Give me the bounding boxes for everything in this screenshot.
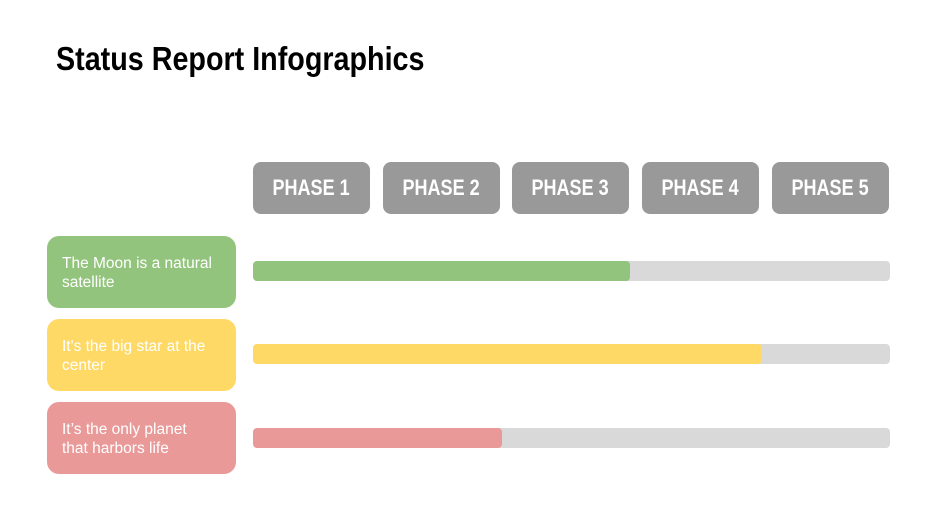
phase 2 (383, 162, 500, 214)
phase 3 (512, 162, 629, 214)
title: Status Report Infographics (56, 40, 424, 77)
progress bar: earth (253, 428, 890, 448)
progress bar: sun (253, 344, 890, 364)
phase 1 (253, 162, 370, 214)
phase 4 (642, 162, 759, 214)
phase 3: PHASE 3 (532, 175, 609, 200)
progress bar: moon (253, 261, 890, 281)
card: earth (47, 402, 236, 474)
card: moon: The Moon is a natural satellite (62, 255, 212, 291)
card: earth: that harbors life (62, 440, 169, 457)
card: moon (47, 236, 236, 308)
phase 5: PHASE 5 (792, 175, 869, 200)
phase header row (253, 162, 889, 214)
phase 2: PHASE 2 (403, 175, 480, 200)
phase 4: PHASE 4 (662, 175, 739, 200)
phase 1: PHASE 1 (273, 175, 350, 200)
card: earth: It’s the only planet (62, 421, 187, 438)
phase 5 (772, 162, 889, 214)
card: sun: It's the big star at the center (62, 338, 205, 374)
card: sun (47, 319, 236, 391)
